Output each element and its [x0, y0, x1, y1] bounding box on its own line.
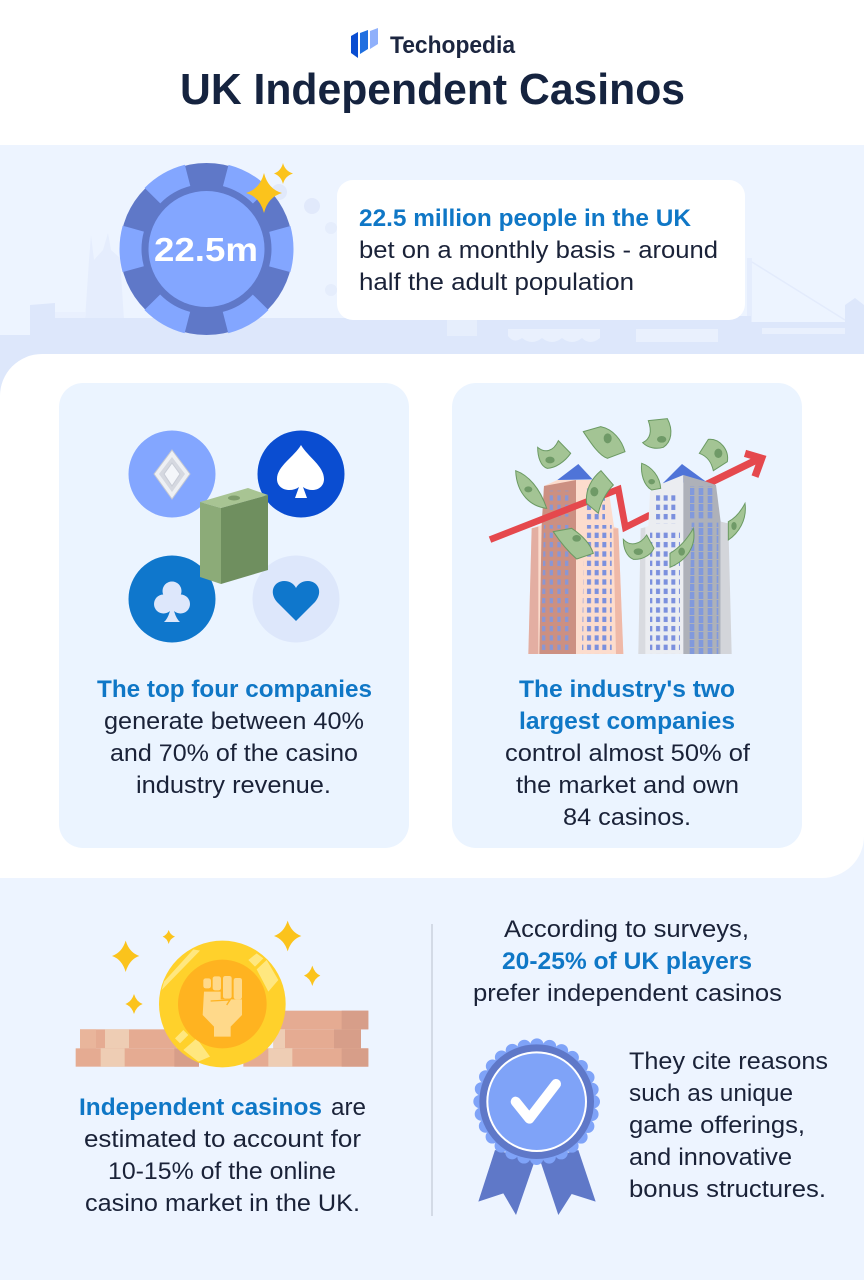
icon: award rosette	[478, 1044, 596, 1215]
body text: are	[331, 1094, 366, 1121]
coin stacks	[76, 1011, 368, 1067]
icon: fist	[203, 976, 242, 1037]
survey text: 20-25% of UK players	[502, 948, 752, 975]
icon: diamond	[128, 430, 216, 518]
card text: industry revenue.	[136, 772, 331, 799]
white middle panel	[0, 354, 864, 878]
reasons text: and innovative	[629, 1144, 792, 1171]
illustration: card suits and cash	[128, 430, 344, 642]
reasons text: They cite reasons	[629, 1048, 828, 1075]
panel: top four companies	[59, 383, 409, 848]
illustration: gold coin and stacks	[76, 921, 368, 1067]
card text: The top four companies	[97, 676, 372, 703]
sparkles	[246, 163, 293, 213]
panel: top statistic	[0, 145, 864, 400]
skyline	[0, 184, 864, 400]
survey text: prefer independent casinos	[473, 980, 782, 1007]
card text: and 70% of the casino	[110, 740, 358, 767]
poker chip	[120, 163, 293, 335]
card text	[97, 676, 372, 799]
tower: left	[528, 464, 623, 654]
chart arrow: lower segment	[490, 489, 650, 540]
card text: generate between 40%	[104, 708, 364, 735]
panel: independent casinos share	[76, 921, 368, 1217]
header	[180, 28, 685, 114]
title: UK Independent Casinos	[180, 65, 685, 114]
icon: heart	[252, 556, 340, 642]
bottom background	[0, 820, 864, 1280]
body text: Independent casinos	[79, 1094, 322, 1121]
survey text: According to surveys,	[504, 916, 749, 943]
card text: control almost 50% of	[505, 740, 750, 767]
body text: casino market in the UK.	[85, 1190, 360, 1217]
tower: right	[638, 464, 732, 654]
illustration: towers and money	[490, 419, 762, 654]
banknote seals	[524, 433, 737, 556]
flying banknotes	[516, 419, 745, 567]
reasons text: bonus structures.	[629, 1176, 826, 1203]
callout text	[359, 205, 718, 296]
survey text	[473, 916, 782, 1007]
reasons text	[629, 1048, 828, 1203]
callout text: half the adult population	[359, 269, 634, 296]
card text: The industry's two	[519, 676, 735, 703]
callout text: 22.5 million people in the UK	[359, 205, 692, 232]
panel: two largest companies	[452, 383, 802, 848]
chip value: 22.5m	[154, 231, 258, 268]
icon: club	[128, 556, 216, 642]
icon: spade	[258, 430, 344, 518]
body text	[79, 1094, 366, 1217]
callout text: bet on a monthly basis - around	[359, 237, 718, 264]
reasons text: game offerings,	[629, 1112, 805, 1139]
icon: stack of cash	[200, 488, 268, 584]
card text: 84 casinos.	[563, 804, 691, 831]
body text: 10-15% of the online	[108, 1158, 336, 1185]
card text: largest companies	[519, 708, 735, 735]
gold coin	[159, 941, 286, 1067]
callout card	[337, 180, 745, 320]
card text: the market and own	[516, 772, 739, 799]
panel: player preference	[473, 916, 828, 1215]
reasons text: such as unique	[629, 1080, 793, 1107]
logo mark	[351, 28, 378, 58]
logo wordmark: Techopedia	[390, 32, 516, 59]
sparkles	[112, 921, 320, 1014]
card text	[505, 676, 750, 831]
chart arrow: upper segment	[703, 453, 762, 486]
body text: estimated to account for	[84, 1126, 361, 1153]
